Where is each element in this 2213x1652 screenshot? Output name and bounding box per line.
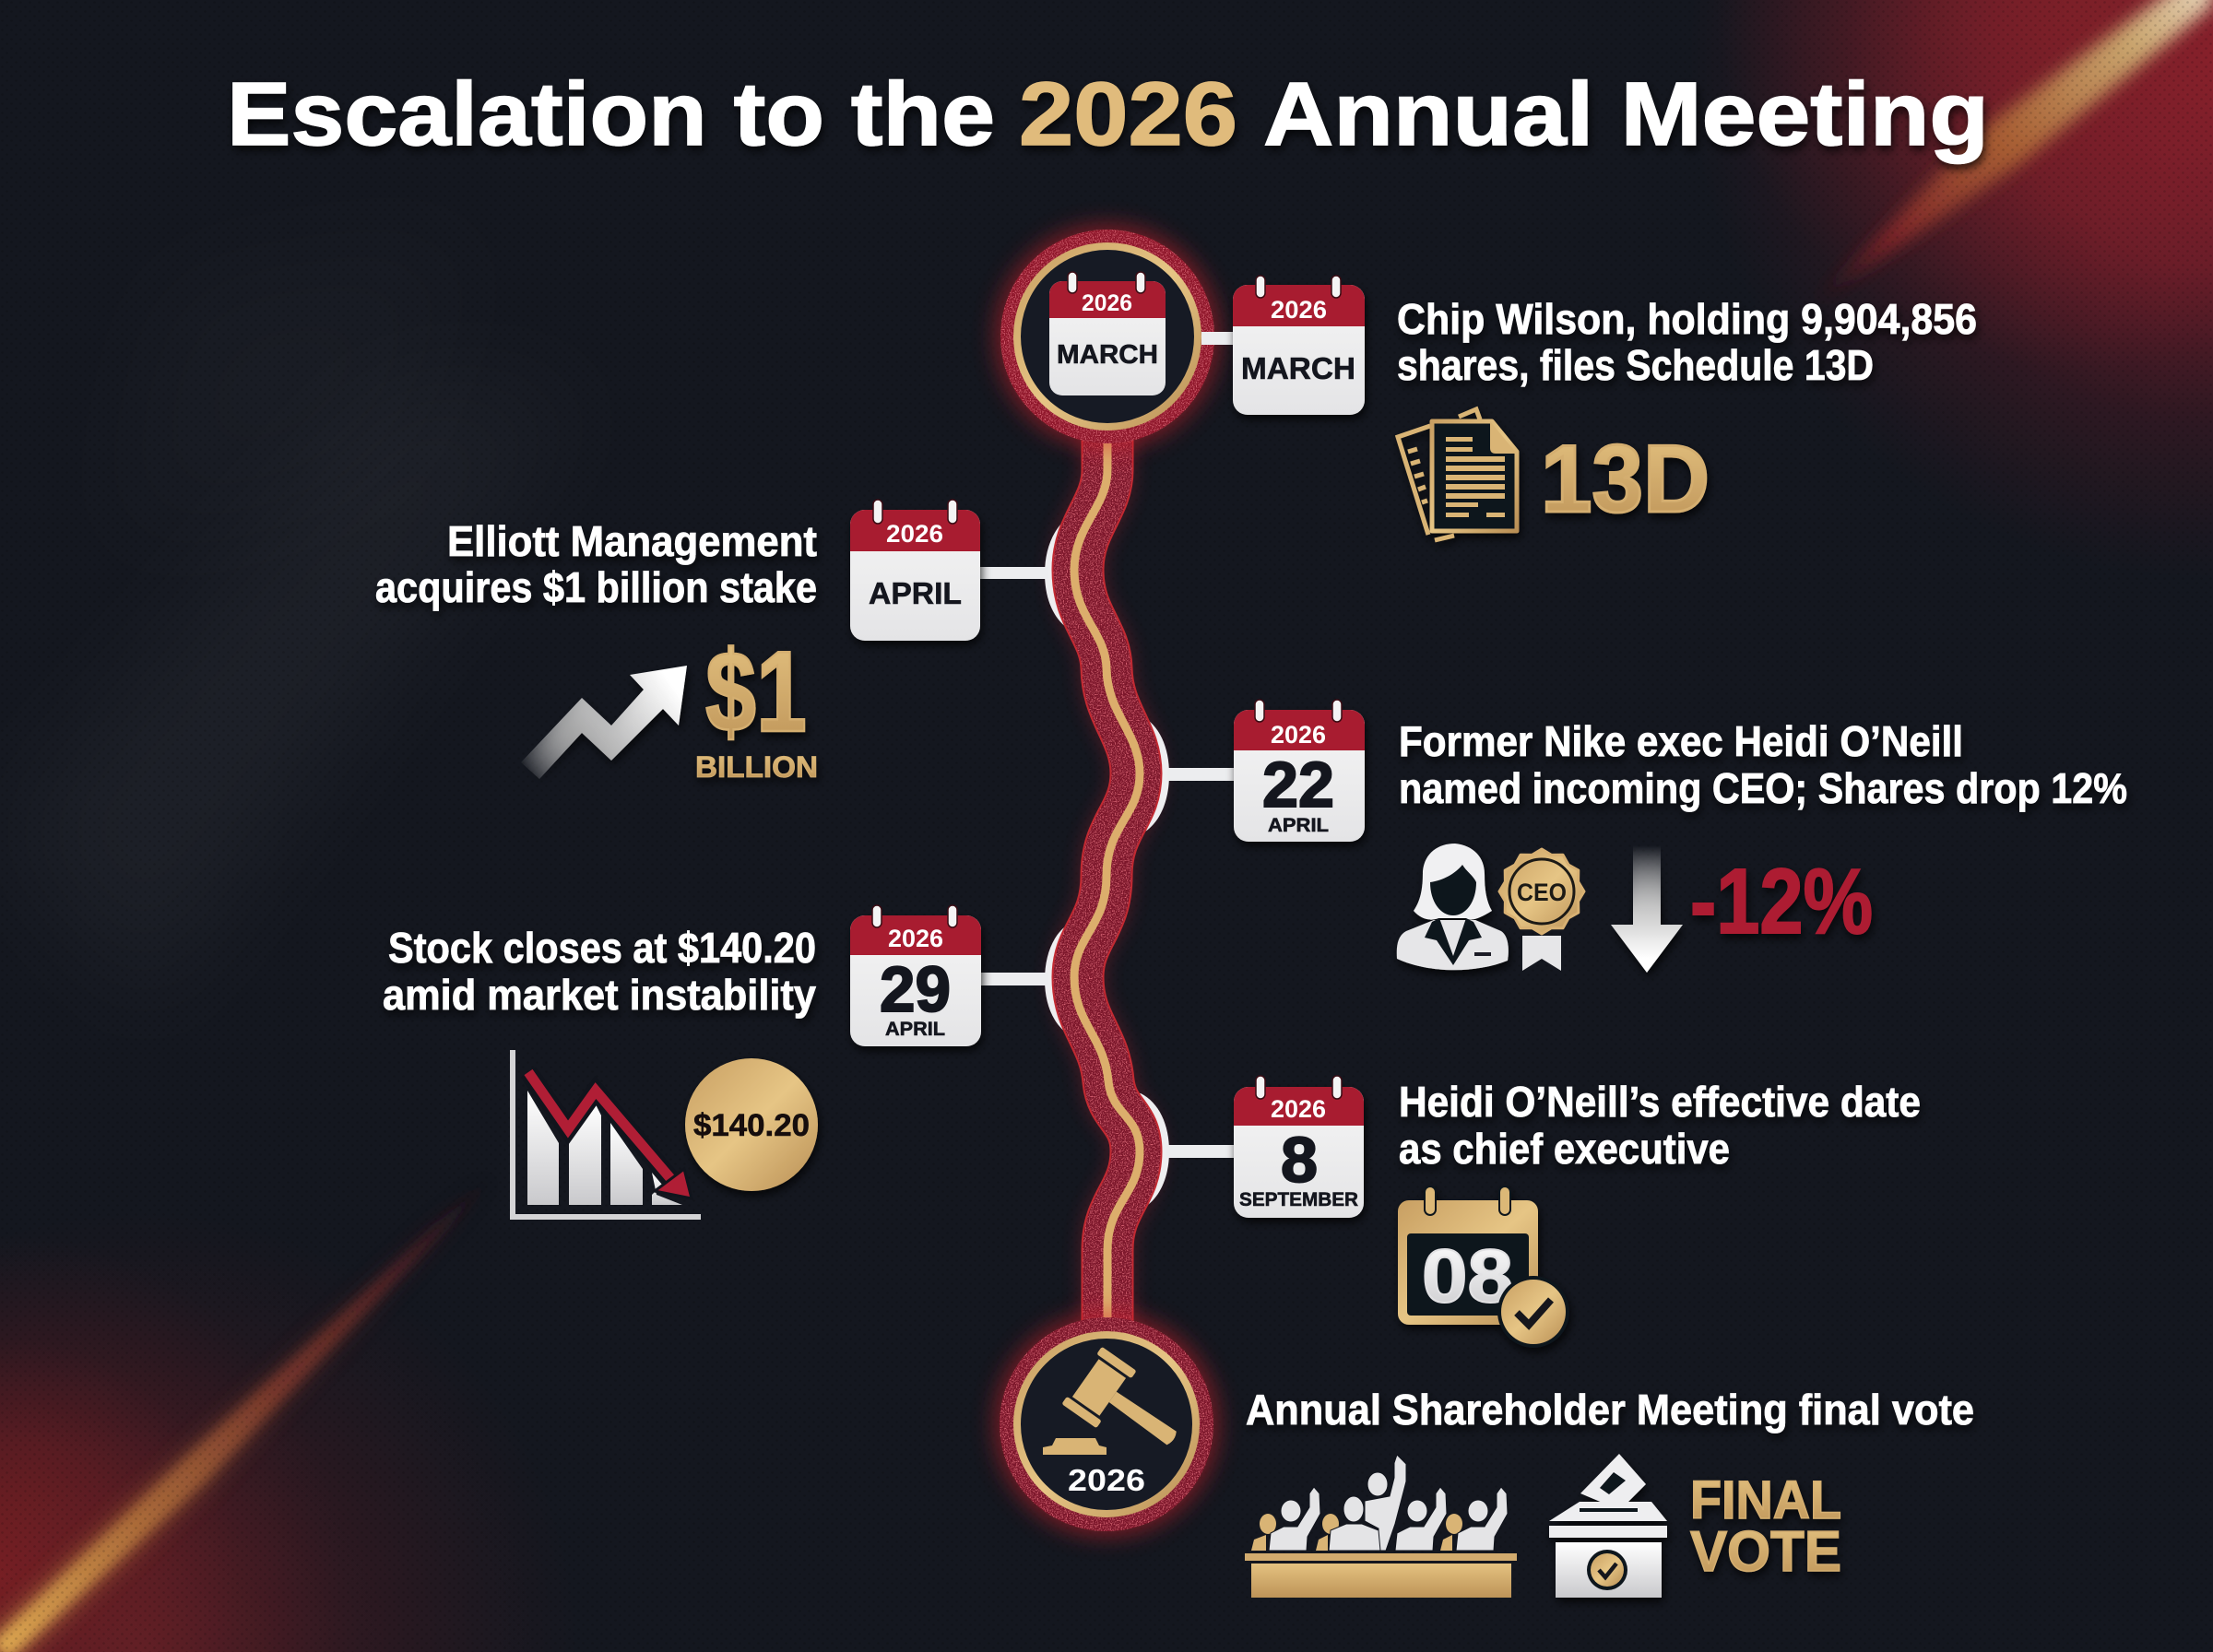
calendar: 8 September: SEPTEMBER [1239,1189,1358,1210]
calendar: 22 April [1234,700,1365,842]
calendar: 29 April [850,905,981,1046]
calendar: 22 April: 22 [1262,749,1334,820]
calendar: March [1233,276,1365,415]
title: 2026 [1019,64,1237,164]
icon: down arrow [1611,845,1683,973]
$1 billion figure: BILLION [695,750,818,784]
text: Heidi O'Neill named CEO [1399,717,2127,812]
text: Elliott Management: Elliott Management [447,517,817,565]
13D label: 13D [1541,426,1710,533]
title: Annual Meeting [1263,64,1989,164]
calendar: 29 April: APRIL [885,1019,945,1040]
calendar: April: APRIL [869,576,962,610]
calendar: 8 September [1234,1076,1364,1218]
text: Elliott Management [375,517,817,611]
connectors [980,332,1236,1158]
text: Chip Wilson: Chip Wilson, holding 9,904,856 [1397,295,1977,343]
icon: gold calendar with check [1398,1186,1569,1348]
calendar: 29 April: 29 [880,953,951,1025]
calendar: 8 September: 8 [1281,1124,1318,1196]
calendar: March: 2026 [1271,296,1327,324]
text: effective date [1399,1078,1921,1173]
calendar: 22 April: APRIL [1268,815,1329,836]
$1 billion figure [695,629,818,784]
final vote label [1690,1470,1841,1584]
text: final vote: Annual Shareholder Meeting final vote [1246,1386,1974,1434]
text: stock close: amid market instability [383,971,816,1019]
start node: March 2026: 2026 [1082,290,1132,316]
icon: CEO rosette [1499,849,1584,971]
timeline spine [1045,430,1169,1327]
text: effective date: Heidi O’Neill’s effective date [1399,1078,1921,1126]
text: Elliott Management: acquires $1 billion stake [375,563,817,611]
price coin: $140.20 [693,1108,810,1143]
icon: gold calendar with check: 08 [1422,1234,1513,1318]
icon: rising arrow [521,666,687,779]
icon: female executive [1397,844,1509,970]
title [227,64,1989,164]
final vote label: VOTE [1690,1520,1841,1584]
calendar: 8 September: 2026 [1271,1095,1326,1123]
text: Heidi O'Neill named CEO: named incoming CEO; Shares drop 12% [1399,764,2127,812]
end node: gavel 2026 [994,1312,1219,1537]
text: stock close [383,924,816,1019]
icon: gavel [1043,1347,1193,1469]
text: effective date: as chief executive [1399,1125,1730,1173]
calendar: March: MARCH [1241,351,1355,385]
icon: ballot box [1549,1454,1667,1598]
start node: March 2026 [995,224,1220,449]
final vote label: FINAL [1690,1470,1841,1530]
calendar: 22 April: 2026 [1271,721,1326,749]
end node: gavel 2026: 2026 [1068,1463,1145,1497]
icon: CEO rosette: CEO [1517,879,1567,906]
icon: documents [1398,409,1517,540]
text: Chip Wilson [1397,295,1977,389]
calendar: 29 April: 2026 [888,925,943,952]
price coin [685,1058,818,1191]
$1 billion figure: $1 [705,629,807,756]
title: Escalation to the [227,64,995,164]
-12% label: -12% [1690,850,1873,953]
calendar: April: 2026 [886,520,943,548]
text: stock close: Stock closes at $140.20 [388,924,816,972]
icon: shareholders at bench [1245,1455,1517,1598]
chart: falling bars [513,1050,701,1217]
text: Chip Wilson: shares, files Schedule 13D [1397,341,1874,389]
calendar: April [850,500,980,641]
text: Heidi O'Neill named CEO: Former Nike exec Heidi O’Neill [1399,717,1963,765]
start node: March 2026: MARCH [1057,340,1158,370]
